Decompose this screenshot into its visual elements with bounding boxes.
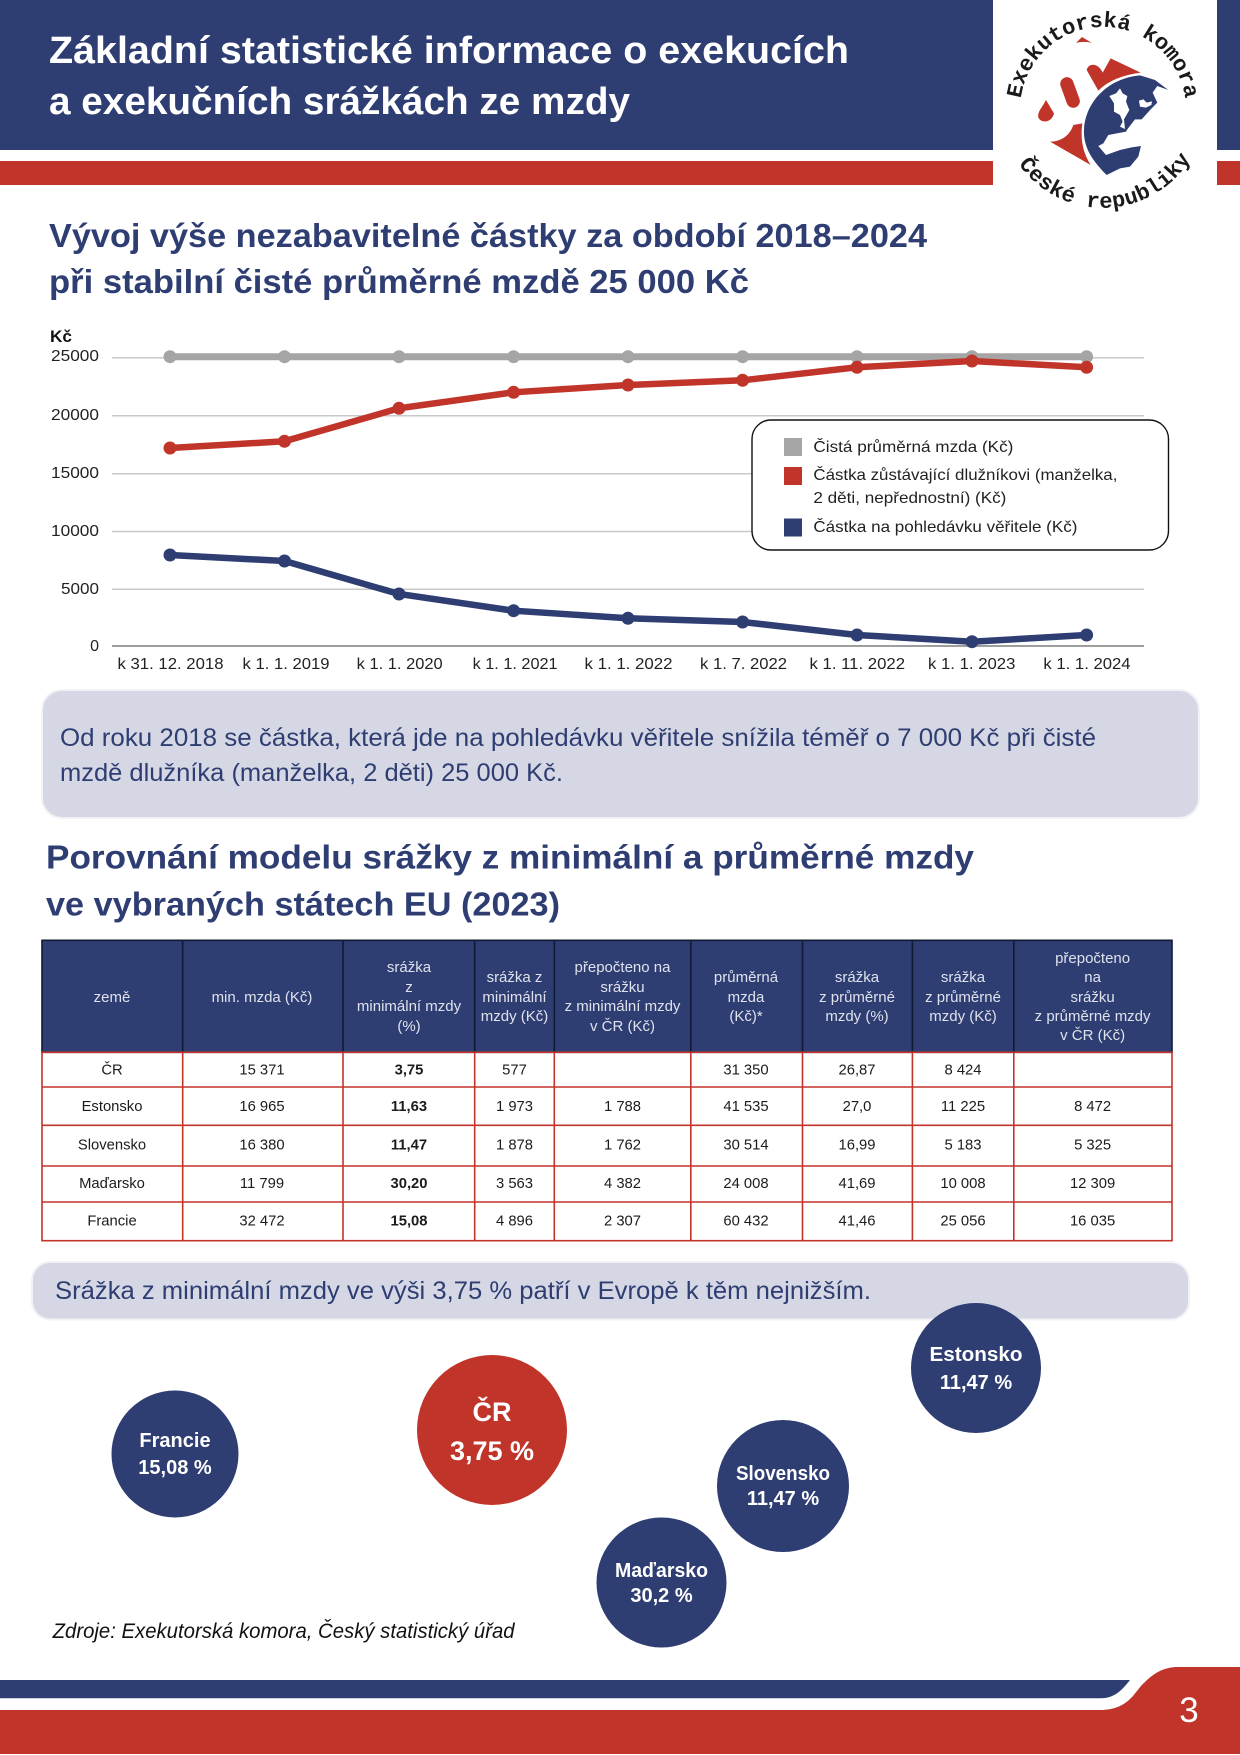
table header: (Kč)* xyxy=(729,1008,763,1025)
table header xyxy=(42,940,1172,1052)
heading: porovnání modelu srážky xyxy=(46,840,974,924)
bubble: ČR: ČR xyxy=(472,1396,512,1427)
table header: minimální xyxy=(482,989,547,1006)
heading: porovnání modelu srážky: ve vybraných státech EU (2023) xyxy=(46,886,560,924)
row: Maďarsko: 12 309 xyxy=(1070,1176,1115,1192)
table header: minimální mzdy xyxy=(357,998,462,1015)
footer band xyxy=(0,1667,1240,1754)
series: čistá průměrná mzda xyxy=(164,350,1093,363)
table header: mzda xyxy=(728,989,765,1006)
row: Estonsko: 41 535 xyxy=(723,1099,769,1115)
row: ČR xyxy=(101,1062,982,1078)
table header: srážku xyxy=(600,979,645,996)
row: Estonsko: 27,0 xyxy=(843,1099,871,1115)
row: Francie: 15,08 xyxy=(390,1214,428,1230)
x axis labels: k 1. 1. 2021 xyxy=(473,656,558,673)
bubble: Slovensko: Slovensko xyxy=(736,1463,830,1485)
row: Francie: Francie xyxy=(87,1214,137,1230)
table header: mzdy (Kč) xyxy=(929,1008,997,1025)
chart legend: Čistá průměrná mzda (Kč) xyxy=(813,437,1013,456)
x axis labels: k 1. 1. 2023 xyxy=(928,656,1015,673)
chart legend: 2 děti, nepřednostní) (Kč) xyxy=(813,490,1006,507)
table header: z průměrné mzdy xyxy=(1035,1008,1151,1025)
row: ČR: 31 350 xyxy=(723,1062,769,1078)
table header: srážka z xyxy=(487,969,542,986)
header band xyxy=(0,0,1240,185)
row: Maďarsko xyxy=(79,1176,1115,1192)
table header: v ČR (Kč) xyxy=(590,1018,655,1035)
row: Slovensko: 16,99 xyxy=(838,1138,876,1154)
y axis labels xyxy=(50,327,99,655)
table: srážky ve vybraných státech EU xyxy=(42,940,1172,1241)
logo: Exekutorská komora České republiky: České republiky xyxy=(1021,152,1190,212)
callout: pokles částky pro věřitele xyxy=(42,690,1199,818)
row: Maďarsko: 3 563 xyxy=(496,1176,533,1192)
row: ČR: ČR xyxy=(101,1062,123,1078)
table header: z xyxy=(405,979,413,996)
logo: Exekutorská komora České republiky: Exekutorská komora xyxy=(1006,10,1196,98)
table header: z průměrné xyxy=(819,989,895,1006)
row: Estonsko: 16 965 xyxy=(239,1099,285,1115)
table grid xyxy=(42,1052,1172,1241)
row: Francie: 16 035 xyxy=(1070,1214,1115,1230)
row: Slovensko: 1 878 xyxy=(496,1138,533,1154)
row: Francie: 41,46 xyxy=(838,1214,876,1230)
bubble: Slovensko: 11,47 % xyxy=(747,1488,819,1510)
line chart xyxy=(50,327,1168,673)
bubble: Estonsko: 11,47 % xyxy=(940,1372,1012,1394)
chart legend xyxy=(752,420,1168,550)
row: Slovensko: 1 762 xyxy=(604,1138,641,1154)
row: Slovensko xyxy=(78,1138,1111,1154)
row: Estonsko: 11 225 xyxy=(941,1099,985,1115)
bubble: Estonsko xyxy=(911,1303,1041,1433)
y axis labels: 25000 xyxy=(51,348,99,365)
title: Základní statistické informace o exekucích xyxy=(49,30,849,72)
row: Maďarsko: 10 008 xyxy=(940,1176,986,1192)
row: Estonsko xyxy=(82,1099,1111,1115)
row: Slovensko: 30 514 xyxy=(723,1138,769,1154)
y axis labels: 15000 xyxy=(51,465,99,482)
row: Maďarsko: Maďarsko xyxy=(79,1176,145,1192)
heading: porovnání modelu srážky: Porovnání modelu srážky z minimální a průměrné mzdy xyxy=(46,840,974,876)
x axis labels: k 1. 1. 2020 xyxy=(357,656,443,673)
table header: průměrná xyxy=(714,969,779,986)
table header: země xyxy=(94,989,130,1006)
row: ČR: 577 xyxy=(502,1062,527,1078)
bubble: Francie: Francie xyxy=(139,1430,211,1452)
chart legend: Částka zůstávající dlužníkovi (manželka, xyxy=(813,465,1117,484)
x axis labels xyxy=(118,656,1131,673)
row: Estonsko: 11,63 xyxy=(391,1099,427,1115)
bubble: Maďarsko: Maďarsko xyxy=(615,1560,708,1582)
y axis labels: 20000 xyxy=(51,407,99,424)
bubble: Maďarsko xyxy=(596,1518,726,1648)
row: Francie: 60 432 xyxy=(723,1214,769,1230)
bubble: Maďarsko: 30,2 % xyxy=(630,1585,693,1607)
row: ČR: 8 424 xyxy=(944,1062,982,1078)
row: Estonsko: 1 973 xyxy=(496,1099,533,1115)
callout: pokles částky pro věřitele: Od roku 2018 se částka, která jde na pohledávku věřitele snížila téměř o 7 000 Kč při čisté xyxy=(60,724,1096,752)
table header: přepočteno na xyxy=(575,959,671,976)
title: a exekučních srážkách ze mzdy xyxy=(49,81,630,123)
bubble: Francie: 15,08 % xyxy=(138,1457,212,1479)
x axis labels: k 1. 1. 2024 xyxy=(1043,656,1131,673)
row: ČR: 15 371 xyxy=(239,1062,285,1078)
table header: (%) xyxy=(397,1018,421,1035)
heading: vývoj nezabavitelné částky xyxy=(49,218,927,301)
x axis labels: k 1. 1. 2019 xyxy=(242,656,330,673)
table header: srážka xyxy=(941,969,986,986)
heading: vývoj nezabavitelné částky: při stabilní čisté průměrné mzdě 25 000 Kč xyxy=(49,264,749,301)
row: Francie xyxy=(87,1214,1115,1230)
row: Francie: 2 307 xyxy=(604,1214,641,1230)
x axis labels: k 1. 7. 2022 xyxy=(700,656,787,673)
row: Francie: 4 896 xyxy=(496,1214,533,1230)
row: Estonsko: 8 472 xyxy=(1074,1099,1111,1115)
table header: min. mzda (Kč) xyxy=(212,989,312,1006)
table header: srážka xyxy=(387,959,432,976)
row: Maďarsko: 4 382 xyxy=(604,1176,641,1192)
row: Francie: 25 056 xyxy=(940,1214,986,1230)
row: Slovensko: Slovensko xyxy=(78,1138,146,1154)
callout: srážka patří k nejnižším: Srážka z minimální mzdy ve výši 3,75 % patří v Evropě k těm nejnižším. xyxy=(55,1277,871,1305)
table header: srážku xyxy=(1071,989,1115,1006)
y axis labels: 0 xyxy=(90,638,99,655)
row: Slovensko: 11,47 xyxy=(391,1138,427,1154)
bubble: Estonsko: Estonsko xyxy=(930,1344,1022,1366)
x axis labels: k 1. 11. 2022 xyxy=(810,656,905,673)
row: ČR: 3,75 xyxy=(395,1062,423,1078)
x axis labels: k 31. 12. 2018 xyxy=(118,656,224,673)
table header: mzdy (Kč) xyxy=(481,1008,548,1025)
y axis labels: 5000 xyxy=(61,581,99,598)
callout: pokles částky pro věřitele: mzdě dlužníka (manželka, 2 děti) 25 000 Kč. xyxy=(60,759,563,787)
title xyxy=(49,30,849,123)
row: Maďarsko: 30,20 xyxy=(390,1176,428,1192)
row: Slovensko: 5 325 xyxy=(1074,1138,1111,1154)
row: Slovensko: 5 183 xyxy=(944,1138,982,1154)
table header: přepočteno xyxy=(1055,950,1130,967)
series: částka na pohledávku věřitele xyxy=(164,548,1093,648)
table header: na xyxy=(1084,969,1102,986)
row: Francie: 32 472 xyxy=(239,1214,285,1230)
table header: v ČR (Kč) xyxy=(1060,1027,1125,1044)
row: Estonsko: Estonsko xyxy=(82,1099,142,1115)
bubble: Francie xyxy=(112,1390,238,1518)
callout: srážka patří k nejnižším xyxy=(32,1262,1189,1320)
table header: srážka xyxy=(835,969,880,986)
page number: 3 xyxy=(1179,1691,1199,1730)
series: částka zůstávající dlužníkovi xyxy=(164,354,1093,454)
row: Maďarsko: 11 799 xyxy=(240,1176,284,1192)
bubble: ČR: 3,75 % xyxy=(450,1436,534,1466)
row: Slovensko: 16 380 xyxy=(239,1138,285,1154)
row: Estonsko: 1 788 xyxy=(604,1099,641,1115)
y axis labels: 10000 xyxy=(51,523,99,540)
row: Maďarsko: 41,69 xyxy=(838,1176,876,1192)
row: Maďarsko: 24 008 xyxy=(723,1176,769,1192)
logo: Exekutorská komora České republiky xyxy=(1006,10,1196,212)
table header: z průměrné xyxy=(925,989,1001,1006)
heading: vývoj nezabavitelné částky: Vývoj výše nezabavitelné částky za období 2018–2024 xyxy=(49,218,927,255)
bubble: ČR xyxy=(417,1355,567,1505)
source note: Zdroje: Exekutorská komora, Český statistický úřad xyxy=(52,1620,516,1643)
chart legend: Částka na pohledávku věřitele (Kč) xyxy=(813,517,1077,536)
table header: mzdy (%) xyxy=(825,1008,889,1025)
table header: z minimální mzdy xyxy=(565,998,681,1015)
bubble: Slovensko xyxy=(717,1420,849,1552)
row: ČR: 26,87 xyxy=(838,1062,876,1078)
x axis labels: k 1. 1. 2022 xyxy=(584,656,673,673)
y axis labels: Kč xyxy=(50,327,72,346)
